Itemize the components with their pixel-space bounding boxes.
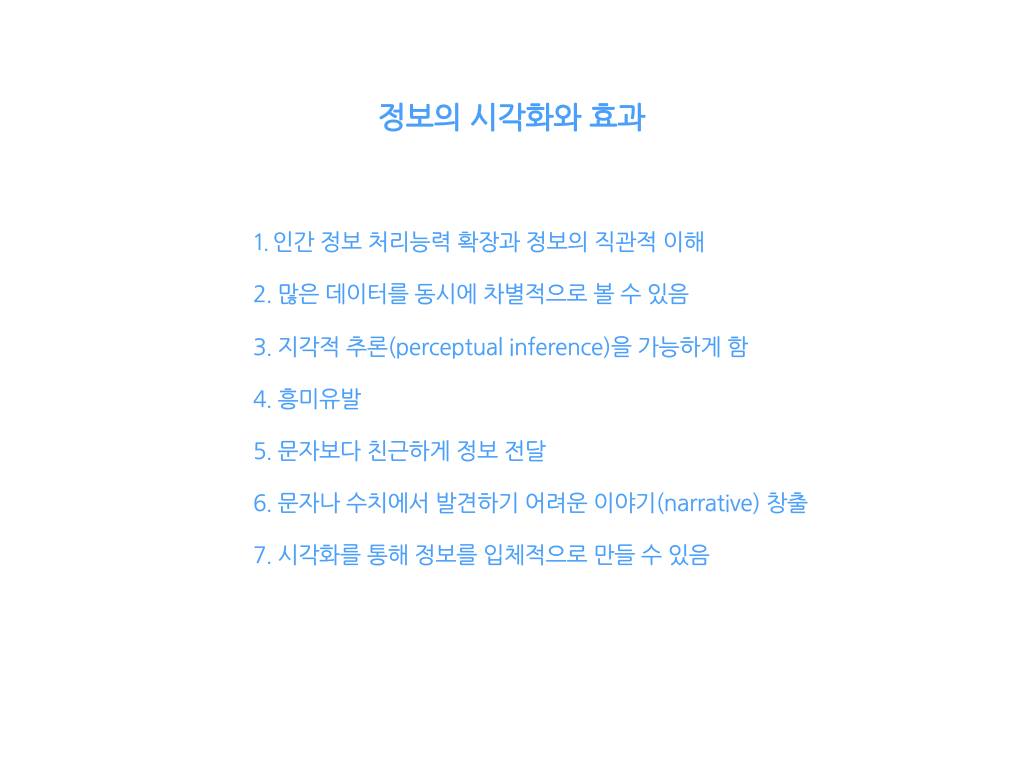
text block: list of effects bbox=[252, 231, 808, 567]
list item 3: 3. 지각적 추론(perceptual inference)을 가능하게 함 bbox=[253, 337, 748, 359]
list item 4: 4. 흥미유발 bbox=[253, 389, 361, 411]
list item 7: 7. 시각화를 통해 정보를 입체적으로 만들 수 있음 bbox=[253, 545, 710, 567]
list item 2: 2. 많은 데이터를 동시에 차별적으로 볼 수 있음 bbox=[253, 284, 689, 306]
list item 1: 1. 인간 정보 처리능력 확장과 정보의 직관적 이해 bbox=[252, 232, 705, 254]
title: 정보의 시각화와 효과 bbox=[378, 103, 645, 133]
list item 6: 6. 문자나 수치에서 발견하기 어려운 이야기(narrative) 창출 bbox=[253, 493, 808, 515]
list item 5: 5. 문자보다 친근하게 정보 전달 bbox=[253, 441, 546, 463]
